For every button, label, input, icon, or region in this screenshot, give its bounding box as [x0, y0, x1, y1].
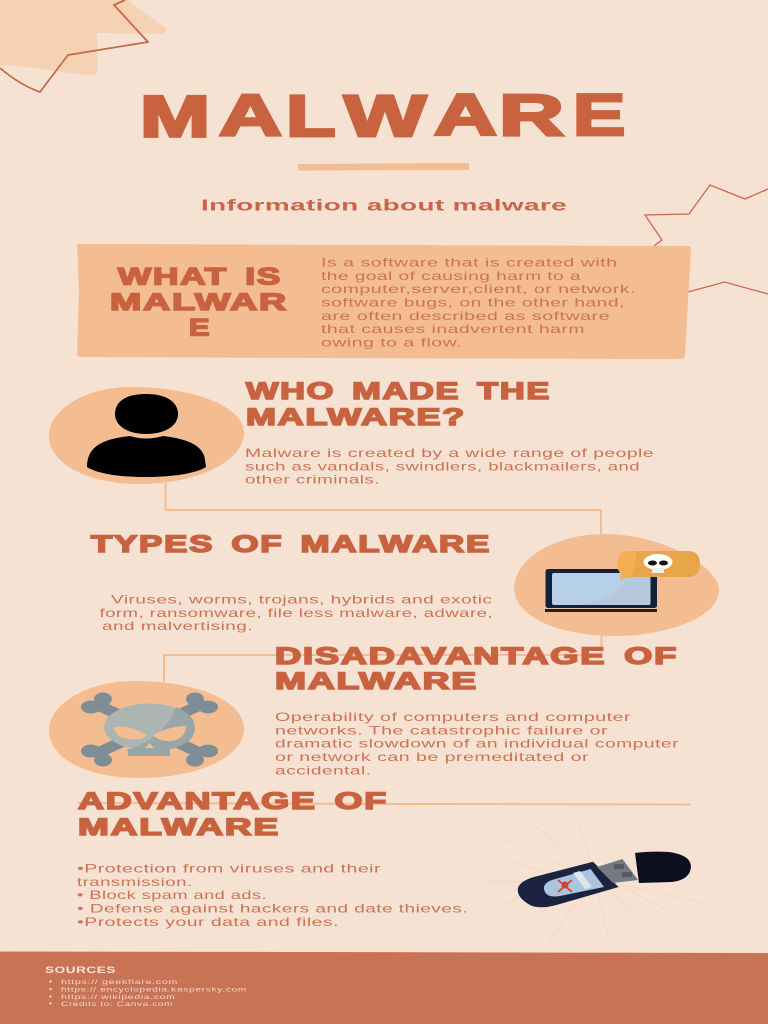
- icon: person in blob: [49, 387, 244, 484]
- title underline: [298, 163, 469, 170]
- text: what is malware: the goal of causing harm to a: [321, 269, 581, 283]
- title: W: [344, 83, 426, 149]
- text: who made the malware: such as vandals, swindlers, blackmailers, and: [245, 460, 640, 474]
- connector: advantage rule: [78, 803, 691, 804]
- connector: types to disadvantage: [164, 634, 602, 682]
- text: what is malware: computer,server,client, or network.: [321, 282, 636, 296]
- subtitle: Information about malware: [201, 198, 567, 214]
- text: who made the malware: Malware is created by a wide range of people: [245, 446, 654, 460]
- title: M: [140, 85, 210, 149]
- connector: who to types: [166, 483, 601, 535]
- text: types of malware: form, ransomware, file less malware, adware,: [100, 606, 493, 620]
- heading: advantage of malware: [78, 788, 388, 841]
- text: what is malware: that causes inadvertent harm: [321, 322, 585, 336]
- text: advantage of malware: • Defense against hackers and date thieves.: [77, 902, 468, 916]
- footer panel: [0, 952, 768, 1024]
- section: types of malware: [91, 531, 493, 633]
- title: L: [286, 83, 336, 148]
- heading: what is malware: MALWAR: [110, 289, 288, 316]
- title: A: [219, 83, 282, 148]
- footer source list: [49, 979, 247, 1008]
- text: advantage of malware: •Protects your data and files.: [77, 915, 339, 929]
- text: what is malware: [321, 256, 636, 350]
- heading: who made the malware: WHO MADE THE: [246, 378, 551, 405]
- heading: types of malware: TYPES OF MALWARE: [91, 531, 491, 558]
- title: A: [434, 82, 497, 148]
- heading: disadvantage of malware: MALWARE: [275, 668, 478, 695]
- footer source list: https:// wikipedia.com: [61, 994, 176, 1001]
- text: disadvantage of malware: dramatic slowdown of an individual computer: [275, 736, 679, 750]
- text: advantage of malware: •Protection from viruses and their: [77, 862, 381, 876]
- section: advantage of malware: [77, 788, 468, 929]
- icon: usb stick with rays: [485, 818, 708, 941]
- heading: what is malware: E: [189, 314, 211, 342]
- text: types of malware: and malvertising.: [102, 619, 253, 633]
- decoration: top-left blob and outline: [0, 0, 166, 92]
- footer source list: https:// encyclopedia.kaspersky.com: [61, 986, 247, 994]
- text: disadvantage of malware: or network can be premeditated or: [275, 750, 589, 764]
- heading: advantage of malware: ADVANTAGE OF: [78, 788, 388, 815]
- footer source list: Credits to: Canva.com: [61, 1001, 173, 1008]
- title: E: [573, 83, 625, 148]
- section: disadvantage of malware: [275, 643, 679, 778]
- section: who made the malware: [245, 378, 654, 486]
- heading: disadvantage of malware: DISADAVANTAGE OF: [275, 643, 678, 670]
- text: disadvantage of malware: networks. The catastrophic failure or: [275, 724, 608, 738]
- decoration: right star outline: [645, 185, 768, 294]
- icon: skull and crossbones in blob: [49, 681, 244, 778]
- panel: what is malware: [77, 244, 691, 359]
- text: who made the malware: [245, 446, 654, 486]
- text: advantage of malware: • Block spam and ads.: [77, 888, 267, 902]
- text: advantage of malware: transmission.: [77, 875, 192, 889]
- heading: what is malware: WHAT IS: [118, 264, 282, 290]
- text: disadvantage of malware: accidental.: [275, 764, 372, 778]
- text: who made the malware: other criminals.: [245, 472, 380, 486]
- text: types of malware: Viruses, worms, trojans, hybrids and exotic: [111, 592, 492, 606]
- heading: who made the malware: MALWARE?: [246, 404, 466, 431]
- text: advantage of malware: [77, 862, 468, 929]
- title: [140, 82, 625, 149]
- text: what is malware: Is a software that is created with: [321, 256, 618, 270]
- text: what is malware: are often described as software: [321, 309, 610, 323]
- heading: disadvantage of malware: [275, 643, 678, 695]
- text: what is malware: owing to a flow.: [321, 336, 462, 350]
- text: types of malware: [100, 592, 493, 633]
- text: disadvantage of malware: [275, 710, 679, 778]
- text: what is malware: software bugs, on the other hand,: [321, 296, 625, 310]
- footer heading: SOURCES: [45, 965, 116, 975]
- heading: who made the malware: [246, 378, 551, 431]
- heading: what is malware: [110, 264, 288, 342]
- title: R: [499, 84, 564, 149]
- icon: laptop with skull bubble in blob: [514, 534, 719, 636]
- text: disadvantage of malware: Operability of computers and computer: [275, 710, 631, 724]
- heading: advantage of malware: MALWARE: [78, 814, 280, 841]
- footer source list: https:// geekflare.com: [61, 979, 178, 986]
